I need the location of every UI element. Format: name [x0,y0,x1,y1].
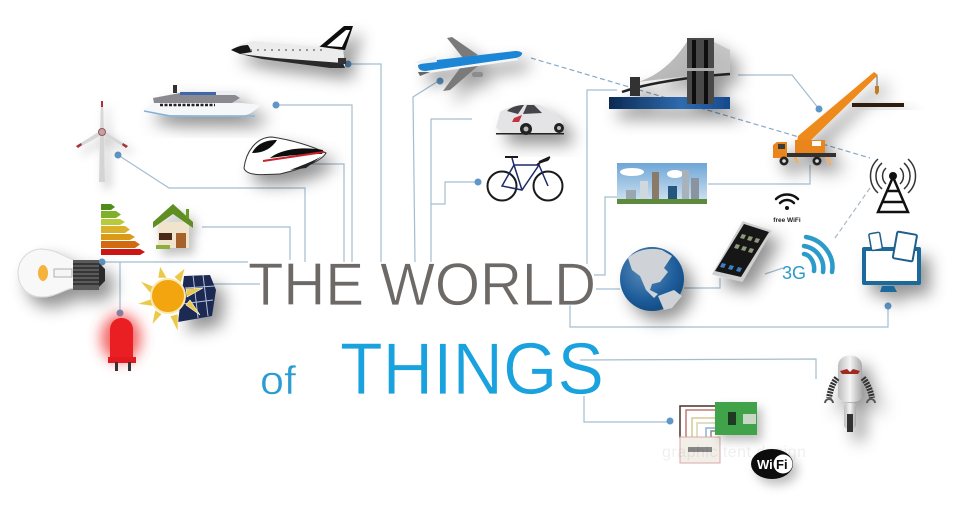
icon: cruise ship [143,85,260,116]
icon: robot [825,356,875,432]
icon: globe [620,247,684,311]
icon: free WiFi [773,194,801,224]
icon: circuit board [680,402,757,463]
icon: beam [852,103,904,107]
icon: light bulb [18,249,105,297]
icon: free WiFi: free WiFi [773,217,801,224]
title: THE WORLD: THE WORLD [248,251,596,318]
title: THINGS: THINGS [340,329,604,410]
watermark text: graphic tent design [662,444,806,461]
icon: monitor and tablets [862,231,921,292]
title: of: of [260,359,297,403]
icon: radio tower [870,159,916,212]
icon: high-speed train [244,137,326,175]
icon: house [153,204,193,249]
icon: wind turbine [76,101,128,182]
icon: sun and solar panel [137,266,216,332]
icon: space shuttle [231,26,353,68]
icon: bridge [609,38,730,109]
icon: city skyline [617,163,707,204]
icon: red LED [101,314,141,371]
icon: car [496,104,564,135]
icon: bicycle [488,157,562,200]
icon: Wi-Fi badge: Wi [757,457,773,472]
icon: Wi-Fi badge [751,449,793,479]
connector lines [102,58,888,422]
icon: Wi-Fi badge: Fi [776,457,788,472]
icon: 3G signal: 3G [782,263,806,283]
icon: airplane [415,37,522,91]
connector end dots [98,60,892,424]
icon: smartphone [713,222,771,281]
icon: energy rating [101,204,145,255]
icon: crane truck [773,72,879,166]
icon: 3G signal [782,237,832,283]
